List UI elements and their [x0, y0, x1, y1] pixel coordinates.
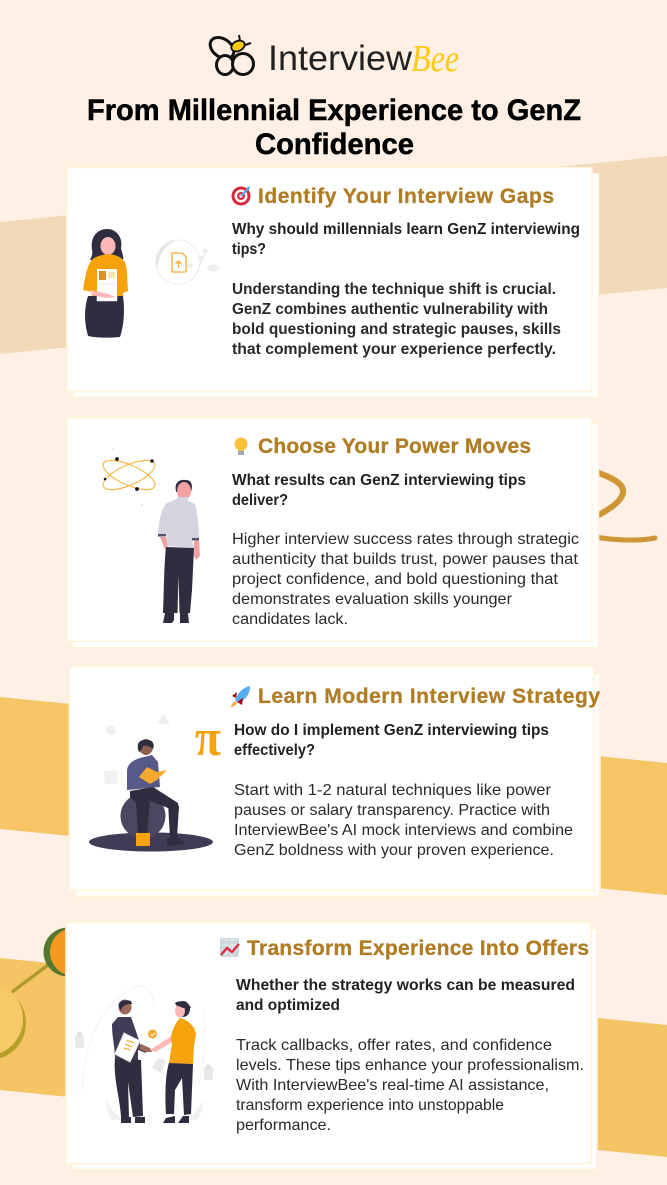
icon: light bulb [234, 438, 248, 455]
illustration: handshake [75, 986, 213, 1123]
answer text: levels. These tips enhance your professionalism. [236, 1057, 584, 1074]
answer text: GenZ combines authentic vulnerability with [232, 301, 548, 318]
panel: identify interview gaps [67, 168, 599, 398]
answer text: Start with 1-2 natural techniques like power [234, 782, 552, 799]
answer text: performance. [236, 1117, 331, 1134]
wordmark: Interview [268, 39, 413, 78]
question [232, 221, 580, 258]
icon: document upload in circle [156, 240, 219, 284]
illustration: standing man [158, 480, 200, 623]
answer text: transform experience into unstoppable [236, 1097, 504, 1114]
title: Confidence [255, 128, 414, 161]
title [87, 94, 581, 161]
title: From Millennial Experience to GenZ [87, 94, 581, 127]
icon: bee [206, 33, 254, 74]
answer text: project confidence, and bold questioning that [232, 571, 559, 588]
question [236, 977, 575, 1014]
answer text: candidates lack. [232, 611, 348, 628]
heading: Identify Your Interview Gaps [258, 185, 554, 208]
panel: learn modern interview strategy [69, 666, 600, 896]
answer text: that complement your experience perfectly. [232, 341, 556, 358]
answer text [236, 1037, 584, 1134]
answer text: bold questioning and strategic pauses, skills [232, 321, 561, 338]
answer text: With InterviewBee's real-time AI assistance, [236, 1077, 549, 1094]
illustration: atom orbit [99, 448, 159, 506]
icon: rocket [231, 686, 250, 707]
question [232, 472, 526, 509]
question: effectively? [234, 742, 315, 759]
question: Whether the strategy works can be measured [236, 977, 575, 994]
answer text [232, 531, 579, 628]
heading: Transform Experience Into Offers [247, 937, 589, 960]
answer text: Track callbacks, offer rates, and confidence [236, 1037, 552, 1054]
answer text [234, 782, 573, 859]
wordmark accent: Bee [411, 38, 459, 80]
question: How do I implement GenZ interviewing tips [234, 722, 549, 739]
heading: Learn Modern Interview Strategy [258, 685, 600, 708]
logo [206, 33, 459, 80]
answer text [232, 281, 561, 358]
answer text: authenticity that builds trust, power pauses that [232, 551, 579, 568]
answer text: demonstrates evaluation skills younger [232, 591, 513, 608]
panel: choose power moves [67, 418, 599, 648]
question: What results can GenZ interviewing tips [232, 472, 526, 489]
question: and optimized [236, 997, 340, 1014]
answer text: Understanding the technique shift is crucial. [232, 281, 556, 298]
question [234, 722, 549, 759]
question: deliver? [232, 492, 288, 509]
answer text: pauses or salary transparency. Practice with [234, 802, 550, 819]
icon: pi symbol: π [195, 710, 221, 767]
icon: chart with rising line [220, 938, 239, 957]
icon: target [232, 186, 250, 206]
answer text: Higher interview success rates through strategic [232, 531, 579, 548]
question: Why should millennials learn GenZ interviewing [232, 221, 580, 238]
answer text: InterviewBee's AI mock interviews and combine [234, 822, 573, 839]
answer text: GenZ boldness with your proven experience. [234, 842, 554, 859]
illustration: man reading on ball [89, 714, 213, 852]
question: tips? [232, 241, 266, 258]
panel: transform experience into offers [66, 922, 597, 1170]
illustration: woman holding resume [83, 229, 128, 338]
heading: Choose Your Power Moves [258, 435, 531, 458]
